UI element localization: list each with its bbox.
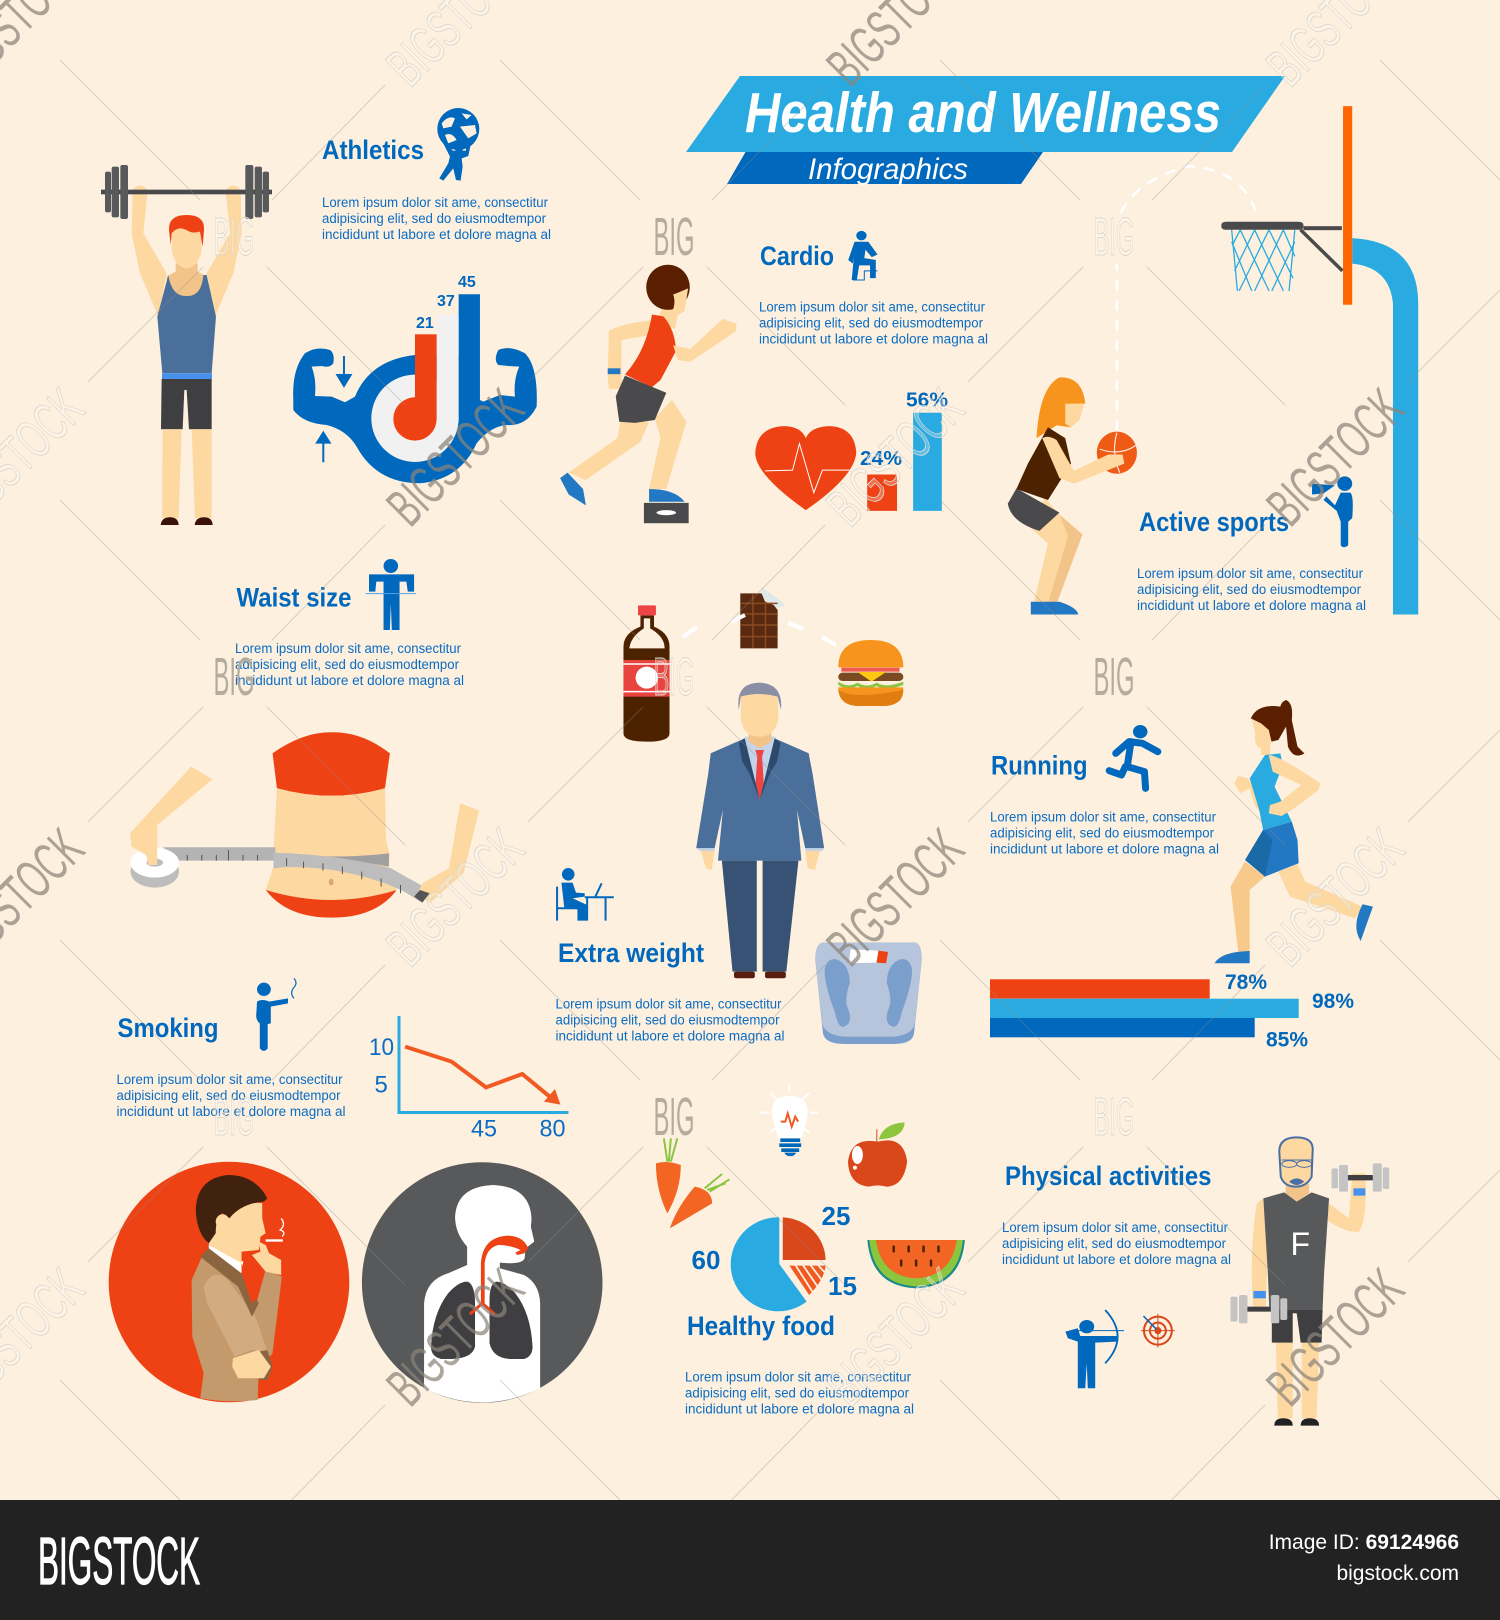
axis label 45: 45: [471, 1116, 497, 1142]
text block: incididunt ut labore et dolore magna al: [322, 227, 551, 242]
connecting dashes: [683, 615, 836, 645]
label 45: 45: [458, 274, 476, 291]
burger: [838, 640, 903, 706]
label 15: 15: [828, 1271, 857, 1301]
text block: [116, 1072, 346, 1119]
shirt letter: F: [1290, 1226, 1310, 1262]
text block: Lorem ipsum dolor sit ame, consectitur: [556, 996, 782, 1012]
text block: Lorem ipsum dolor sit ame, consectitur: [1137, 566, 1363, 581]
line chart: [369, 1016, 568, 1142]
label 78%: 78%: [1225, 971, 1267, 994]
watermark overlay: BIG: [1094, 207, 1134, 267]
label 24%: 24%: [860, 448, 902, 470]
label 98%: 98%: [1312, 990, 1354, 1013]
text block: adipisicing elit, sed do eiusmodtempor: [1002, 1236, 1226, 1251]
icon: archer: [1065, 1310, 1124, 1388]
step runner figure: [560, 265, 736, 523]
food icons: [656, 1085, 965, 1311]
watermark overlay: BIGSTOCK: [375, 377, 535, 537]
panel: smoking: [109, 978, 602, 1403]
text block: [1002, 1220, 1231, 1267]
bathroom scale: [815, 943, 922, 1044]
waist with tape measure: [130, 732, 479, 918]
text block: incididunt ut labore et dolore magna al: [116, 1104, 346, 1119]
footer url: bigstock.com: [1336, 1562, 1459, 1585]
footer bar: [0, 1500, 1500, 1620]
text block: Lorem ipsum dolor sit ame, consectitur: [759, 300, 985, 314]
axis label 5: 5: [374, 1072, 388, 1098]
heading: Running: [991, 750, 1088, 780]
watermark overlay: BIGSTOCK: [1255, 1257, 1415, 1417]
icon: watermelon: [867, 1240, 965, 1288]
text block: Lorem ipsum dolor sit ame, consectitur: [116, 1072, 343, 1087]
title: Health and Wellness: [745, 81, 1221, 145]
text block: incididunt ut labore et dolore magna al: [990, 842, 1219, 856]
panel: healthy food: [656, 1085, 965, 1416]
text block: Lorem ipsum dolor sit ame, consectitur: [685, 1370, 911, 1384]
watermark overlay: BIG: [654, 647, 694, 707]
text block: Lorem ipsum dolor sit ame, consectitur: [235, 641, 461, 656]
image id: Image ID: 69124966: [1269, 1531, 1459, 1554]
text block: Lorem ipsum dolor sit ame, consectitur: [1002, 1220, 1228, 1235]
label 25: 25: [822, 1201, 850, 1231]
text block: incididunt ut labore et dolore magna al: [685, 1402, 914, 1416]
watermark overlay: BIGSTOCK: [815, 817, 975, 977]
heading: Active sports: [1139, 507, 1289, 537]
watermark overlay: BIGSTOCK: [375, 817, 535, 977]
text block: adipisicing elit, sed do eiusmodtempor: [235, 657, 459, 672]
text block: adipisicing elit, sed do eiusmodtempor: [322, 211, 546, 226]
text block: [235, 641, 464, 688]
bar 78%: [990, 979, 1210, 999]
label 85%: 85%: [1266, 1028, 1308, 1052]
text block: incididunt ut labore et dolore magna al: [556, 1028, 784, 1044]
text block: [685, 1370, 914, 1416]
panel: waist size: [130, 559, 479, 918]
text block: [990, 810, 1219, 856]
heading: Extra weight: [558, 938, 704, 968]
text block: Lorem ipsum dolor sit ame, consectitur: [322, 195, 548, 210]
icon: person at desk: [557, 868, 614, 921]
panel: cardio: [560, 231, 988, 523]
watermark overlay: BIG: [214, 647, 254, 707]
watermark overlay: BIGSTOCK: [1255, 817, 1415, 977]
text block: Lorem ipsum dolor sit ame, consectitur: [990, 810, 1216, 824]
icon: smoking person: [256, 978, 296, 1051]
heading: Physical activities: [1005, 1161, 1212, 1191]
label 60: 60: [692, 1245, 720, 1275]
running woman: [1214, 700, 1373, 963]
text block: adipisicing elit, sed do eiusmodtempor: [116, 1088, 341, 1103]
bar 98%: [990, 999, 1299, 1018]
title banner: [686, 76, 1285, 186]
heading: Smoking: [118, 1013, 218, 1043]
axis label 10: 10: [369, 1034, 394, 1061]
text block: adipisicing elit, sed do eiusmodtempor: [1137, 582, 1361, 597]
panel: extra weight: [556, 587, 922, 1044]
ball trajectory: [1117, 166, 1258, 431]
watermark overlay: BIG: [654, 1087, 694, 1147]
text block: [759, 300, 988, 346]
banner main: [686, 76, 1285, 152]
horizontal bar chart: [990, 971, 1354, 1052]
pie chart: [731, 1217, 832, 1311]
panel: athletics: [101, 108, 551, 525]
muscle gauge chart: [293, 294, 537, 483]
heading: Healthy food: [687, 1311, 835, 1341]
fitness man with dumbbells: [1231, 1137, 1389, 1426]
icon: person on step: [848, 231, 878, 280]
label 56%: 56%: [906, 390, 948, 412]
icon: light bulb: [761, 1085, 818, 1156]
text block: adipisicing elit, sed do eiusmodtempor: [685, 1386, 909, 1400]
heading: Cardio: [760, 241, 834, 271]
bottle: [623, 605, 670, 742]
label 21: 21: [416, 315, 434, 332]
label 37: 37: [437, 293, 455, 310]
icon: atlas with globe: [437, 108, 479, 181]
basketball player: [1008, 377, 1137, 614]
lungs circle: [362, 1162, 602, 1403]
text block: adipisicing elit, sed do eiusmodtempor: [556, 1012, 780, 1028]
text block: incididunt ut labore et dolore magna al: [1002, 1252, 1231, 1267]
watermark overlay: BIGSTOCK: [375, 1257, 535, 1417]
weightlifter figure: [101, 165, 272, 525]
panel: active sports: [1008, 106, 1418, 614]
icon: person with megaphone: [1312, 476, 1353, 547]
axis label 80: 80: [540, 1116, 566, 1142]
basketball hoop: [1221, 106, 1418, 614]
businessman: [696, 683, 824, 978]
text block: [322, 195, 551, 242]
smoker circle: [109, 1162, 349, 1402]
heart with bars: [755, 413, 942, 511]
icon: target: [1141, 1314, 1175, 1348]
banner sub: [727, 152, 1043, 184]
icon: runner: [1109, 725, 1158, 788]
chocolate bar: [740, 587, 786, 648]
text block: [1137, 566, 1366, 613]
watermark overlay: BIG: [214, 207, 254, 267]
text block: [556, 996, 784, 1044]
heading: Athletics: [322, 135, 424, 165]
bar 85%: [990, 1018, 1255, 1037]
text block: incididunt ut labore et dolore magna al: [235, 673, 464, 688]
icon: carrots: [656, 1138, 730, 1228]
panel: physical activities: [1002, 1137, 1389, 1426]
icon: standing person: [366, 559, 416, 630]
icon: apple: [848, 1122, 907, 1187]
watermark overlay: BIG: [654, 207, 694, 267]
watermark overlay: BIGSTOCK: [815, 1257, 975, 1417]
watermark overlay: BIG: [214, 1087, 254, 1147]
panel: running: [990, 700, 1373, 1052]
text block: incididunt ut labore et dolore magna al: [759, 332, 988, 346]
subtitle: Infographics: [808, 153, 968, 186]
footer bar: BIGSTOCK: [38, 1524, 200, 1599]
text block: adipisicing elit, sed do eiusmodtempor: [759, 316, 983, 330]
watermark overlay: BIG: [1094, 1087, 1134, 1147]
watermark overlay: BIG: [1094, 647, 1134, 707]
text block: adipisicing elit, sed do eiusmodtempor: [990, 826, 1214, 840]
text block: incididunt ut labore et dolore magna al: [1137, 598, 1366, 613]
heading: Waist size: [236, 582, 352, 612]
watermark overlay: BIGSTOCK: [1255, 377, 1415, 537]
watermark overlay: BIGSTOCK: [815, 377, 975, 537]
